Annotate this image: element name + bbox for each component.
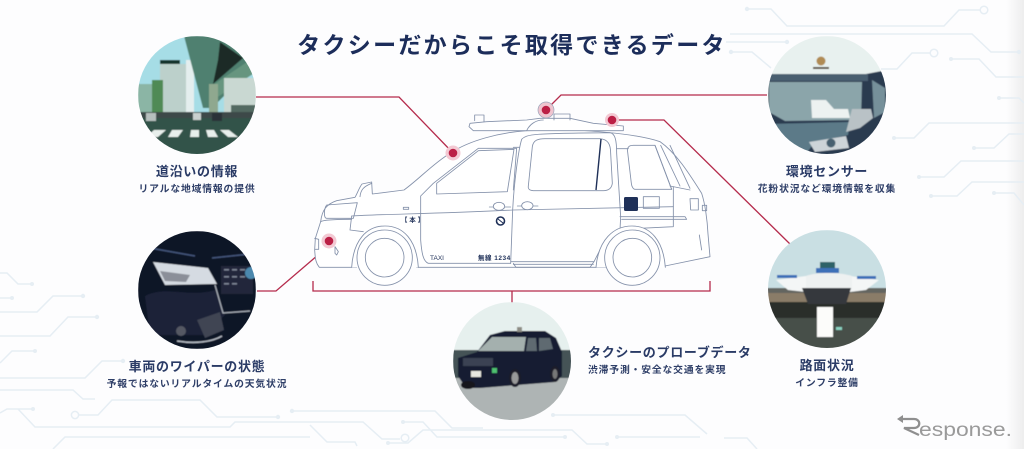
connector lines [256, 95, 790, 303]
rear windows [627, 145, 672, 189]
text: road surface [795, 358, 859, 389]
title: タクシーだからこそ取得できるデータ [297, 32, 727, 58]
front door [421, 148, 517, 263]
headlight and front detail [315, 203, 357, 255]
text: environment sensor [758, 164, 896, 195]
text: environment sensor: 花粉状況など環境情報を収集 [758, 184, 896, 195]
sliding door [511, 133, 621, 263]
text: road surface: インフラ整備 [795, 378, 859, 389]
text: roadside information: 道沿いの情報 [156, 164, 238, 179]
watermark logo: esponse. [919, 420, 1012, 441]
pillar joints [513, 147, 628, 149]
text: environment sensor: 環境センサー [786, 164, 868, 179]
tail lights [690, 199, 707, 250]
photo: road surface sensor [767, 230, 887, 350]
text: vehicle wiper: 予報ではないリアルタイムの天気状況 [107, 379, 287, 390]
roof rack sensor [469, 118, 623, 131]
body outline [315, 130, 710, 267]
door markings: 【 本 】 [401, 215, 424, 224]
text: taxi probe data: タクシーのプローブデータ [588, 345, 752, 360]
photo: taxi probe [453, 302, 573, 422]
photo: environment sensor [767, 36, 887, 155]
wheels [352, 226, 418, 267]
rear hatch and belt [352, 207, 673, 216]
door markings: TAXI [430, 255, 444, 262]
text: taxi probe data: 渋滞予測・安全な交通を実現 [588, 365, 726, 376]
door markings: 無線 1234 [478, 253, 511, 262]
handles [489, 205, 538, 208]
text: vehicle wiper [107, 359, 287, 390]
taxi line drawing [315, 114, 710, 285]
watermark logo [897, 415, 1012, 441]
marker dots [322, 102, 619, 248]
photo: roadside view [138, 36, 256, 156]
text: taxi probe data [588, 345, 752, 376]
text: roadside information [138, 164, 256, 195]
text: roadside information: リアルな地域情報の提供 [138, 184, 256, 195]
text: road surface: 路面状況 [800, 358, 854, 373]
photo: car front [138, 231, 257, 349]
text: vehicle wiper: 車両のワイパーの状態 [129, 359, 265, 374]
door markings [401, 139, 638, 262]
